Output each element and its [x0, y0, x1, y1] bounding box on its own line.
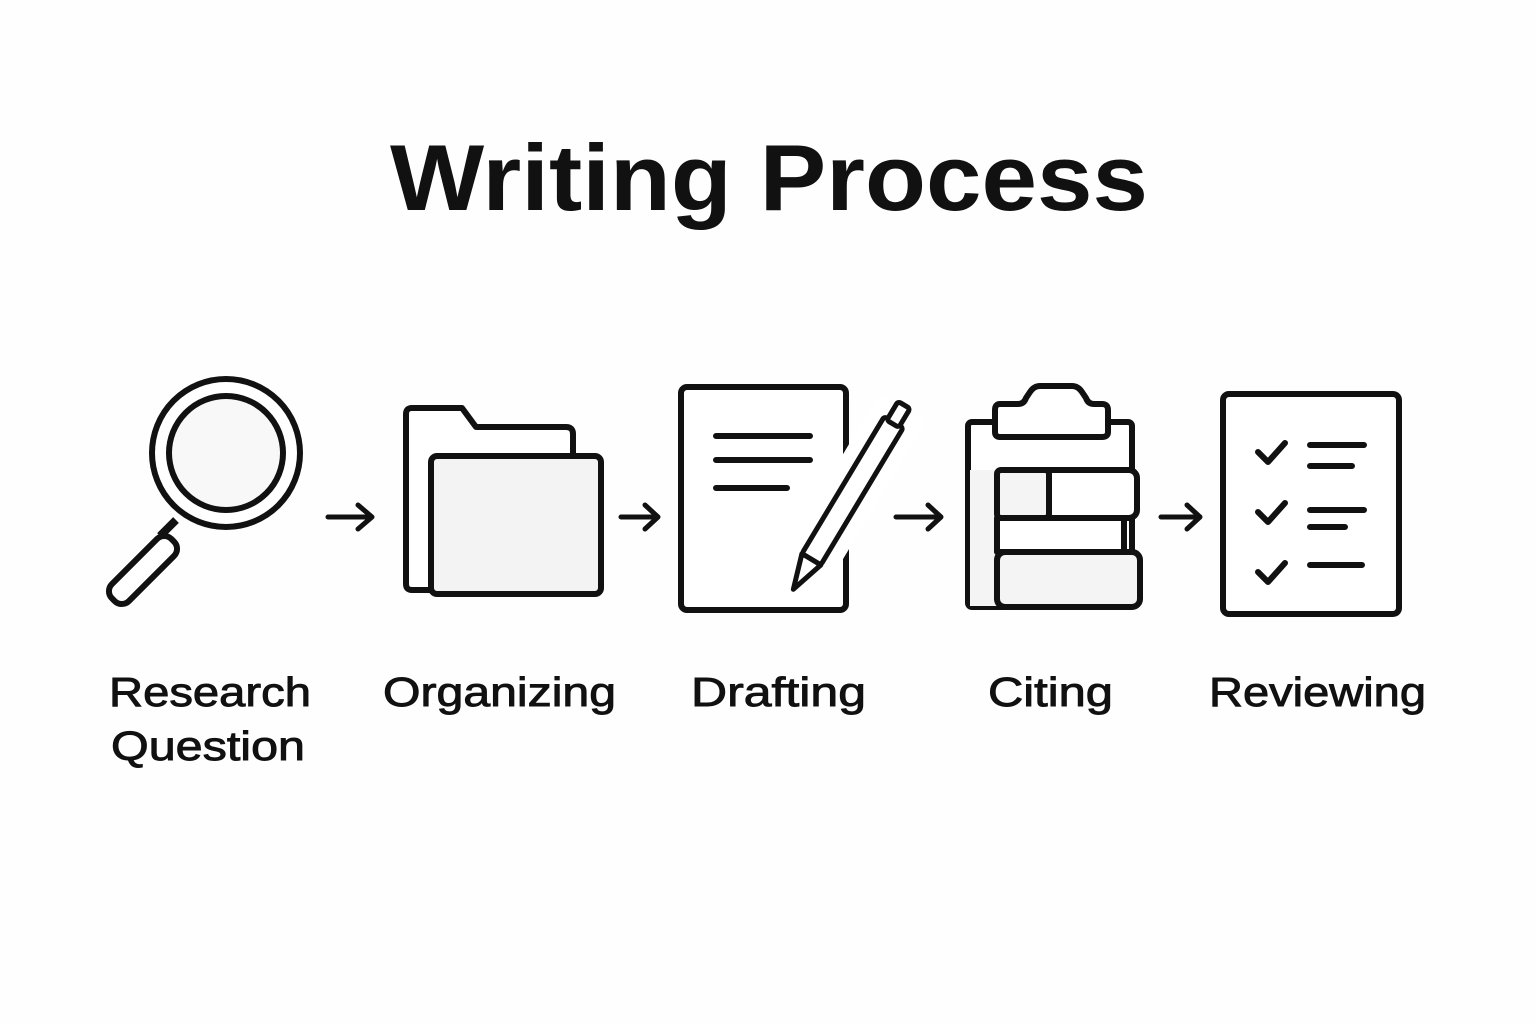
- icon: clipboard with books: [968, 386, 1140, 607]
- label: Citing: Citing: [988, 669, 1113, 715]
- icon: document with pen: [681, 387, 921, 610]
- label: Research Question: Question: [111, 723, 305, 769]
- arrow 2: [621, 505, 658, 529]
- label: Research Question: Research: [109, 669, 311, 715]
- label: Research Question: [109, 669, 311, 769]
- label: Organizing: Organizing: [383, 669, 616, 715]
- arrow 1: [328, 505, 372, 529]
- arrow 3: [896, 505, 941, 529]
- icon: folders: [406, 408, 601, 594]
- arrow 4: [1161, 505, 1200, 529]
- icon: checklist: [1223, 394, 1399, 614]
- label: Reviewing: Reviewing: [1209, 669, 1426, 715]
- label: Drafting: Drafting: [691, 669, 866, 715]
- title: Writing Process: [390, 125, 1148, 230]
- icon: magnifying glass: [105, 379, 300, 608]
